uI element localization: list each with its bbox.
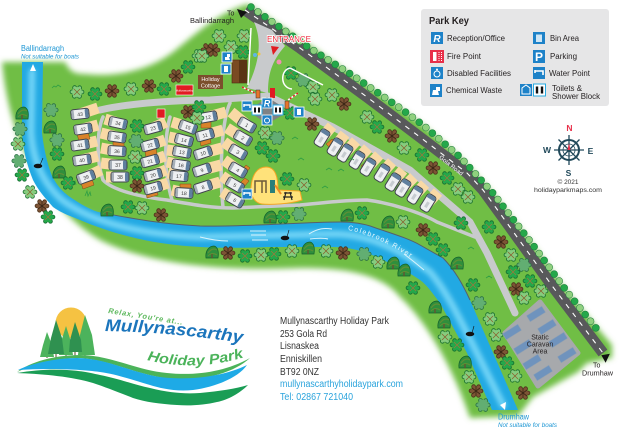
park tracks [98,22,515,313]
compass [534,123,602,194]
panel: park key [421,9,609,106]
river label: Colebrook River [348,226,412,257]
caravans with plot numbers: 35 [114,135,120,141]
caravans with plot numbers: 13 [179,150,185,156]
caravans with plot numbers: 21 [147,158,154,166]
address block: Mullynascarthy Holiday Park [280,316,390,327]
key items right column: P [535,50,543,64]
caravans with plot numbers: 22 [147,142,154,150]
river label: Ballindarragh: Ballindarragh [21,44,64,53]
trees [13,31,546,410]
river label: Drumhaw: Not suitable for boats [498,423,557,429]
address block [280,316,403,403]
road direction labels: To [593,362,600,370]
compass: N [566,123,573,133]
caravans with plot numbers: 5 [232,183,237,189]
holiday cottage and reception area: Cottage [201,84,220,90]
caravans with plot numbers: 12 [205,115,212,121]
key items left column: Reception/Office [447,34,506,43]
caravans with plot numbers: 17 [176,174,182,180]
static caravan area: Area [533,348,547,356]
holiday cottage and reception area: Mullynascarthy [176,88,194,92]
caravans with plot numbers: 1 [244,123,249,129]
static caravan area: Static [531,334,549,342]
map icons [157,52,304,199]
compass: S [566,168,572,178]
static caravan area: Caravan [527,342,553,348]
key items right column: Bin Area [550,34,580,43]
caravans with plot numbers: 10 [200,150,207,158]
road direction labels: To [227,10,234,18]
address block: mullynascarthyholidaypark.com [280,379,403,390]
caravans with plot numbers: 2 [240,136,245,142]
key items left column: Chemical Waste [446,86,503,95]
playground [251,167,302,204]
caravans with plot numbers: 36 [114,149,120,155]
road direction labels: Drumhaw [582,370,614,378]
caravans with plot numbers [70,108,437,213]
road direction labels [190,9,614,378]
caravans with plot numbers: 20 [150,172,157,180]
key items right column: Parking [550,52,577,61]
heading: park key: Park Key [429,16,469,27]
caravans with plot numbers: 42 [80,127,87,133]
map icons: R [264,98,271,108]
holiday cottage and reception area [176,28,323,124]
road label: Gola Road [437,155,464,177]
address block: Lisnaskea [280,341,319,352]
static caravan area [503,302,578,386]
compass: E [588,146,594,156]
caravans with plot numbers: 34 [114,120,121,128]
caravans with plot numbers: 8 [201,185,206,191]
caravans with plot numbers: 16 [178,163,184,169]
caravans with plot numbers: 19 [150,185,157,193]
key items right column: Water Point [549,69,591,78]
river label: Drumhaw: Drumhaw [498,412,529,422]
logo [17,306,250,406]
logo tagline: Relax, You're at... [108,306,183,327]
caravans with plot numbers: 18 [181,191,187,197]
caravans with plot numbers: 15 [184,124,192,132]
sand pitches [80,108,438,203]
address block: Enniskillen [280,354,322,365]
caravans with plot numbers: 6 [232,198,237,204]
entrance label: ENTRANCE [267,35,311,44]
logo subtitle: Holiday Park [147,348,243,368]
key items left column: R [433,34,441,45]
river: Colebrook River [22,62,518,410]
caravans with plot numbers: 14 [180,137,187,145]
caravans with plot numbers: 3 [235,150,240,156]
entrance label [267,35,311,55]
key items left column: Disabled Facilities [447,69,511,78]
holiday cottage and reception area: Holiday [201,77,220,83]
address block: Tel: 02867 721040 [280,392,353,403]
caravans with plot numbers: 41 [77,143,84,149]
caravans with plot numbers: 37 [115,163,121,169]
compass: W [543,145,552,155]
logo name: Mullynascarthy [105,319,244,345]
caravans with plot numbers: 9 [200,168,205,174]
caravans with plot numbers: 23 [150,125,157,133]
hedge along road [251,7,600,333]
caravans with plot numbers: 11 [202,132,209,140]
road: Gola Road [245,10,603,353]
river ripples [200,229,424,270]
river label: Ballindarragh: Not suitable for boats [21,54,79,60]
compass: holidayparkmaps.com [534,187,602,194]
river label: Ballindarragh [21,44,79,71]
caravans with plot numbers: 43 [77,112,83,118]
key items right column [520,32,601,101]
wildlife icons [34,158,474,336]
key items left column: Fire Point [447,52,482,61]
grass tufts [52,85,492,278]
caravans with plot numbers: 38 [117,175,123,181]
key items right column: Toilets & [552,84,583,93]
key items right column: Shower Block [552,92,601,101]
key items left column [430,32,511,97]
address block: BT92 0NZ [280,367,319,378]
road direction labels: Ballindarragh [190,18,234,25]
caravans with plot numbers: 39 [83,174,90,182]
river label: Drumhaw [498,402,557,429]
address block: 253 Gola Rd [280,329,327,340]
caravans with plot numbers: 4 [235,168,240,174]
compass: © 2021 [557,178,579,186]
caravans with plot numbers: 40 [79,158,86,164]
